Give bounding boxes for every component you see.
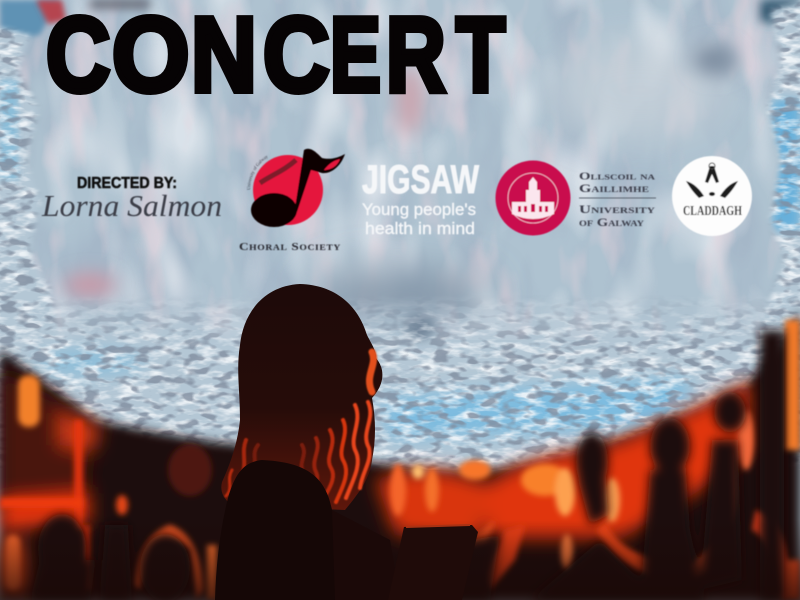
lit curls [226,352,374,502]
logo: jigsaw: Young people's [362,200,476,219]
arm [332,510,400,600]
hair [221,284,382,510]
logo: choral society: Choral Society [239,241,341,253]
logo: university of galway: Gaillimhe [579,183,649,195]
dark figures [30,330,784,600]
logo: jigsaw: health in mind [365,219,475,238]
icon: claddagh hands [686,166,738,198]
crest [496,160,570,236]
director credit: Lorna Salmon [41,188,222,223]
logo: choral society: University of Galway [246,155,268,190]
frost crystals band and edges [0,0,800,480]
logo: claddagh [672,156,752,236]
red glow [0,370,750,595]
logo: jigsaw [362,158,479,238]
music folder [388,525,478,600]
fire-lit choir background [0,310,800,600]
logo: university of galway: of Galway [579,217,644,229]
logo: claddagh: CLADDAGH [683,204,742,219]
singer silhouette [215,284,478,600]
logo: university of galway: Ollscoil na [579,172,655,182]
title [46,0,505,114]
logo: university of galway: University [579,204,655,216]
body [215,460,340,600]
logo: university of galway [496,160,656,236]
logo: jigsaw: JIGSAW [362,158,479,202]
flames [18,375,40,427]
logo: choral society [238,148,346,253]
director credit: DIRECTED BY: [77,175,177,192]
